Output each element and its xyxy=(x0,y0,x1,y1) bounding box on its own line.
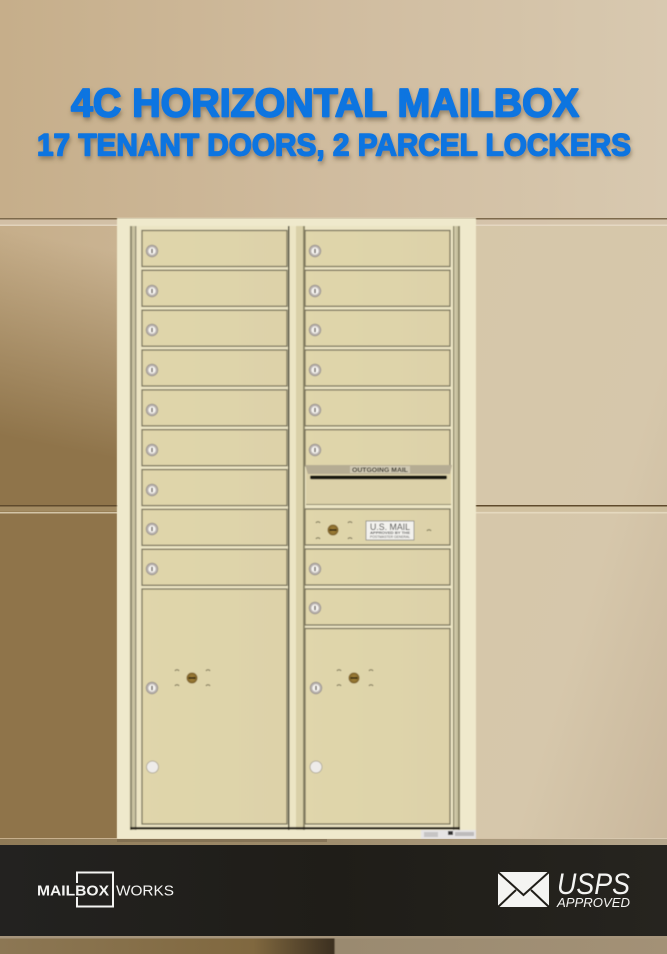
outgoing mail slot: OUTGOING MAIL xyxy=(352,468,408,474)
U.S. Mail plate: U.S. MAIL xyxy=(370,522,410,533)
title line 2: 17 TENANT DOORS, 2 PARCEL LOCKERS xyxy=(37,126,631,162)
badge: USPS approved xyxy=(498,868,630,910)
outgoing mail slot xyxy=(305,465,452,505)
keyed locks xyxy=(146,245,322,694)
badge: USPS approved: USPS xyxy=(557,868,630,901)
U.S. Mail plate: APPROVED BY THE xyxy=(370,531,411,535)
logo: Mailbox Works xyxy=(37,872,174,906)
left column doors xyxy=(142,230,287,824)
right column doors xyxy=(305,230,450,824)
parcel locker hardware xyxy=(146,522,431,773)
U.S. Mail plate: POSTMASTER GENERAL xyxy=(370,535,410,539)
logo: Mailbox Works: MAILBOX xyxy=(37,882,109,900)
title line 1: 4C HORIZONTAL MAILBOX xyxy=(71,82,579,126)
U.S. Mail plate xyxy=(366,521,414,540)
mailbox unit xyxy=(117,218,476,839)
icon: envelope xyxy=(498,872,549,907)
badge: USPS approved: APPROVED xyxy=(556,895,630,910)
footer band xyxy=(0,839,667,954)
logo: Mailbox Works: WORKS xyxy=(116,882,174,900)
title xyxy=(37,82,631,162)
outer frame xyxy=(117,218,476,839)
label sticker xyxy=(421,830,476,839)
